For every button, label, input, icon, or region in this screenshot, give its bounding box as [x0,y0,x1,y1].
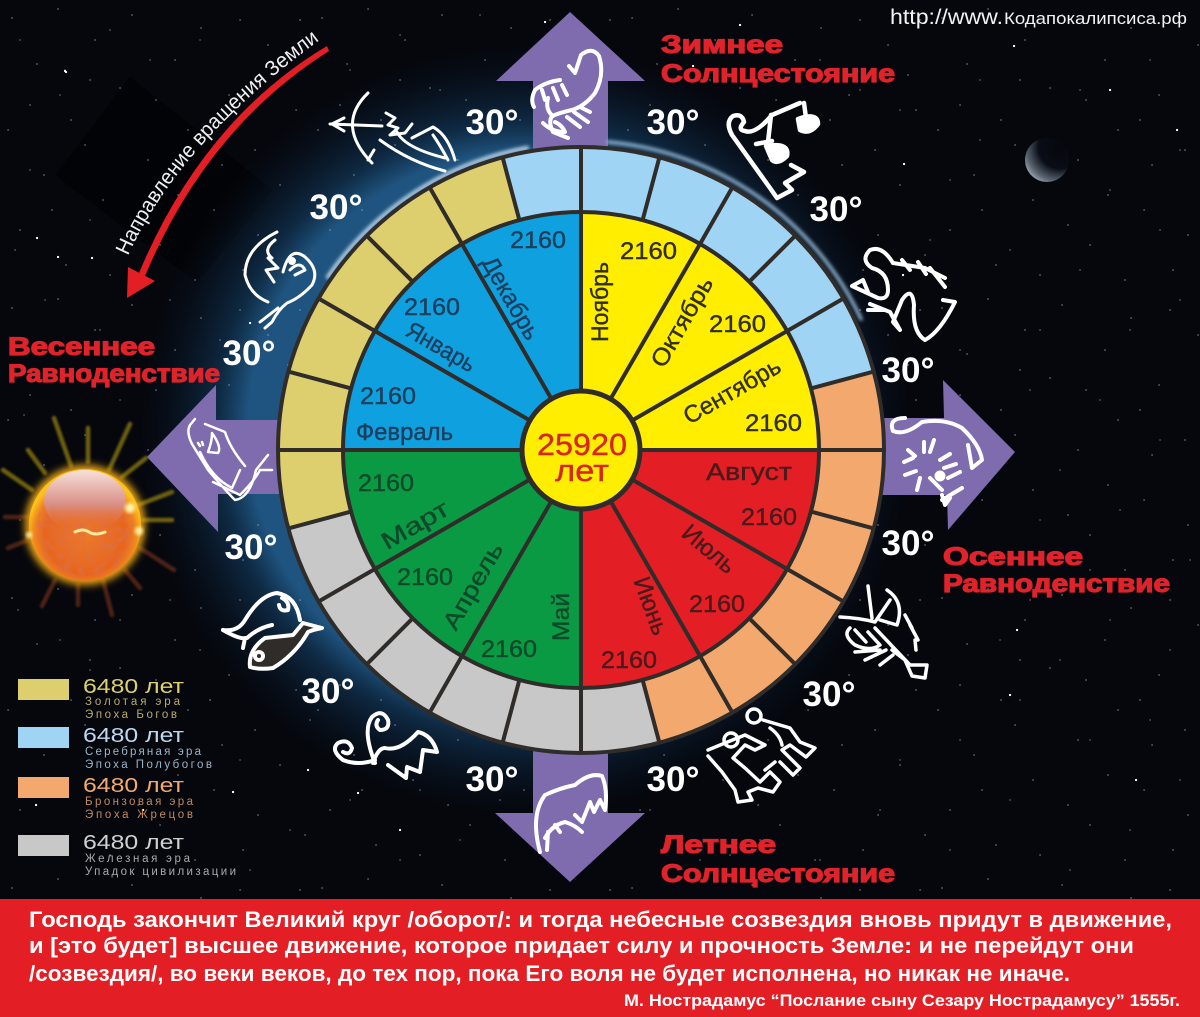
rotation label: Направление вращения Земли [116,32,318,254]
legend item: golden era: Эпоха Богов [85,709,177,721]
icon: cancer [840,586,927,678]
zodiac wheel: 2160 [709,311,766,338]
zodiac wheel: 2160 [358,470,414,497]
heading: summer solstice: Солнцестояние [661,860,895,888]
month labels and durations: Декабрь [476,252,545,345]
legend [18,676,236,878]
zodiac wheel: 2160 [397,564,453,591]
30 degree labels: 30° [225,528,277,567]
zodiac wheel: 2160 [745,410,802,437]
icon: sun [3,418,174,615]
zodiac wheel: Ноябрь [587,262,614,342]
30 degree labels: 30° [302,672,354,711]
icon: libra [729,103,818,198]
heading: winter solstice [661,31,895,88]
heading: spring equinox [8,333,220,388]
outer ring: bronze era [643,372,884,743]
heading: summer solstice: Летнее [661,831,776,859]
arrow: winter solstice up [496,12,645,155]
legend item: iron era [18,832,236,878]
zodiac wheel: 2160 [741,504,797,531]
legend item: bronze era: Эпоха Жрецов [85,809,193,821]
website url [890,6,1187,29]
arrow: autumn equinox right [870,380,1015,530]
month labels and durations: Январь [401,317,480,378]
zodiac wheel: Март [376,495,454,556]
zodiac wheel: Сентябрь [679,353,786,430]
planet atmosphere glow [140,45,910,815]
30 degree labels: 30° [803,675,855,714]
zodiac wheel: 2160 [620,238,677,265]
30 degree labels: 30° [466,760,518,799]
legend item: bronze era [18,775,194,821]
zodiac wheel: Апрель [438,538,509,635]
icon: aries [335,713,437,778]
dark rectangle artifact [55,77,273,283]
arrow: spring equinox left [147,385,300,532]
hub: total years: 25920 [537,427,627,462]
icon: leo [892,418,982,505]
outer ring: silver era [503,147,874,388]
zodiac wheel: Июль [676,519,741,580]
heading: autumn equinox: Равноденствие [943,570,1170,598]
heading: autumn equinox [943,543,1170,598]
30 degree labels: 30° [882,351,934,390]
outer ring: golden era [278,157,519,528]
heading: winter solstice: Солнцестояние [661,60,895,88]
zodiac wheel: 2160 [689,591,745,618]
month labels and durations: 2160 [404,294,460,321]
arrow: summer solstice down [495,745,645,882]
icon: aquarius [245,232,315,328]
icon: moon crescent [1025,138,1069,182]
heading: winter solstice: Зимнее [661,31,783,59]
30 degree labels: 30° [223,334,275,373]
legend item: golden era [18,676,184,721]
quote band [0,899,1200,1017]
icon: pisces [223,593,322,669]
quote text: /созвездия/, во веки веков, до тех пор, пока Его воля не будет исполнена, но никак не иначе. [29,961,1070,986]
30 degree labels: 30° [466,103,518,142]
30 degree labels: 30° [310,188,362,227]
hub: total years: лет [555,453,609,488]
website url: http://www. [890,6,1003,29]
zodiac wheel: Май [548,593,575,641]
heading: spring equinox: Весеннее [8,333,155,361]
heading: autumn equinox: Осеннее [943,543,1083,571]
quote text: Господь закончит Великий круг /оборот/: и тогда небесные созвездия вновь придут в движение, [29,907,1172,932]
quote attribution: М. Нострадамус “Послание сыну Сезару Нострадамусу” 1555г. [624,991,1180,1010]
legend item: golden era: 6480 лет [83,676,184,698]
legend item: iron era: 6480 лет [83,832,184,854]
quote text: и [это будет] высшее движение, которое придает силу и прочность Земле: и не перейдут они [29,933,1134,958]
zodiac wheel: Август [706,459,792,486]
hub: total years [522,391,640,509]
quote text [29,907,1172,986]
month labels and durations: 2160 [510,227,566,254]
atmosphere rim [328,142,861,319]
30 degree labels: 30° [647,760,699,799]
legend item: silver era: 6480 лет [83,725,184,747]
icon: capricorn [188,419,272,500]
quadrant: green [343,450,581,688]
icon: taurus [536,775,606,852]
legend item: silver era [18,725,212,771]
arrow: earth rotation direction [127,46,329,298]
zodiac wheel [278,147,884,753]
heading: summer solstice [661,831,895,888]
zodiac wheel: 2160 [601,647,657,674]
legend item: silver era: Эпоха Полубогов [85,759,212,771]
30 degree labels [223,103,934,799]
legend item: silver era: Серебряная эра [85,746,202,758]
quadrant: blue [343,212,581,450]
30 degree labels: 30° [647,103,699,142]
quadrant: red [581,450,819,688]
30 degree labels: 30° [882,524,934,563]
zodiac wheel: Июнь [628,573,673,639]
legend item: iron era: Железная эра [85,853,191,865]
month labels and durations: Февраль [356,419,453,446]
heading: spring equinox: Равноденствие [8,360,220,388]
legend item: golden era: Золотая эра [85,696,181,708]
icon: scorpius-like figure [852,249,955,340]
website url: Кодапокалипсиса.рф [1004,9,1187,28]
icon: gemini [708,709,815,802]
month labels and durations [356,227,566,446]
icon: scorpio [532,51,601,138]
icon: sagittarius [330,93,455,171]
outer ring: iron era [288,512,659,753]
quadrant: yellow [581,212,819,450]
zodiac wheel: 2160 [481,636,537,663]
legend item: bronze era: 6480 лет [83,775,184,797]
month labels and durations: 2160 [360,383,416,410]
legend item: bronze era: Бронзовая эра [85,796,194,808]
legend item: iron era: Упадок цивилизации [85,866,236,878]
30 degree labels: 30° [810,190,862,229]
zodiac wheel: Октябрь [646,272,719,372]
